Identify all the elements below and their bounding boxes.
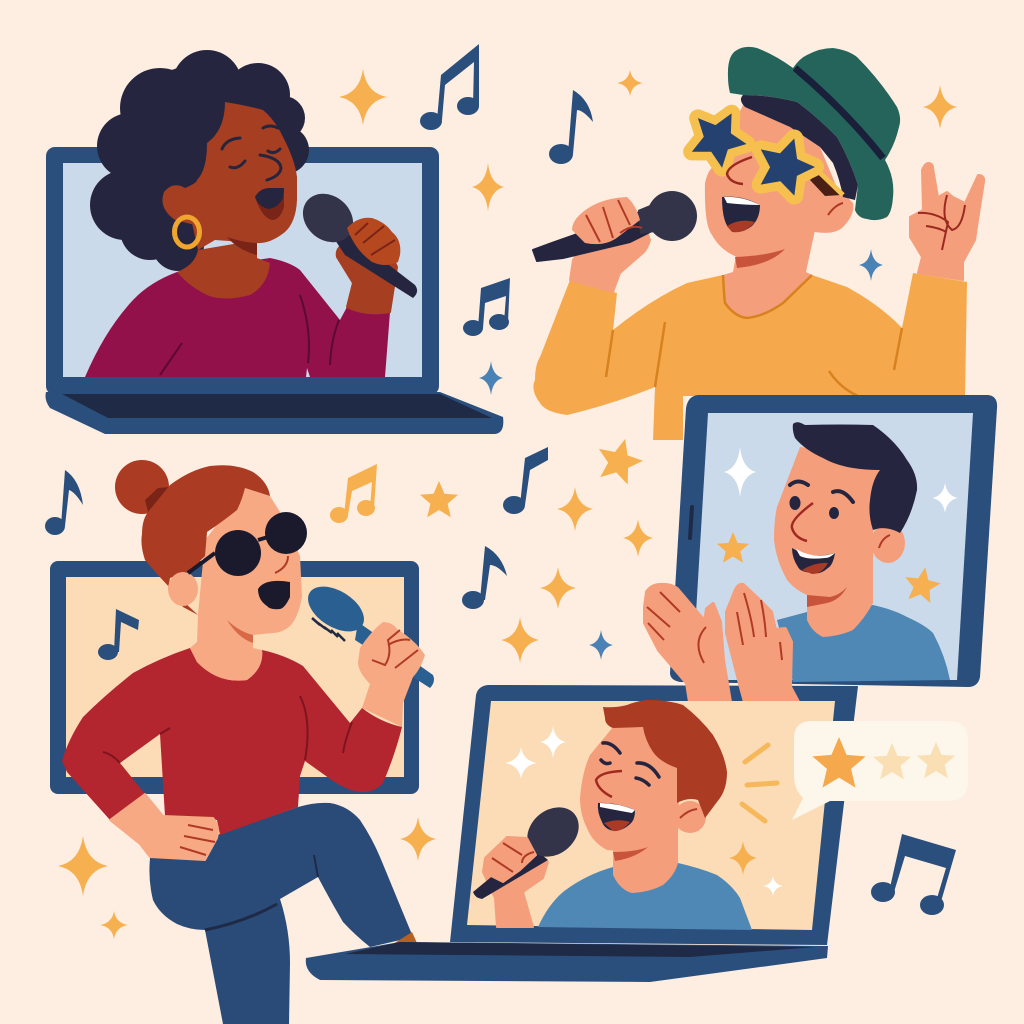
neck: [613, 825, 678, 893]
mouth: [598, 803, 635, 831]
sparkles and stars: [58, 69, 957, 939]
left hand: [645, 585, 730, 702]
single note lower: [462, 546, 507, 609]
laptop: top left: [46, 147, 503, 434]
orange music note: [330, 464, 377, 523]
palm: [570, 213, 650, 292]
shoe: [393, 932, 417, 944]
nose: [596, 771, 622, 797]
eyes and brows: [601, 743, 659, 785]
face: [705, 105, 840, 258]
eye: [727, 157, 752, 184]
sweater folds: [606, 322, 902, 396]
laptop: bottom right screen: [467, 701, 835, 930]
person: laughing singer with microphone: [473, 700, 777, 930]
fingers: [572, 197, 640, 244]
jeans: [149, 803, 413, 1024]
palm: [483, 850, 548, 927]
person: smiling viewer: [774, 422, 950, 682]
chin shadow: [227, 237, 257, 255]
hair: [90, 50, 309, 271]
ear: [162, 185, 195, 225]
fingers: [347, 218, 400, 265]
face: [185, 102, 297, 250]
microphone: [473, 845, 548, 899]
hair: [741, 95, 858, 200]
eyes brows nose: [222, 126, 281, 180]
small music note on screen: [98, 609, 139, 660]
hair: [141, 465, 270, 615]
shirt folds: [160, 295, 339, 375]
face: [580, 725, 680, 852]
single note top: [549, 90, 593, 164]
earring: [174, 217, 200, 247]
sweater: [533, 273, 967, 440]
neck: [177, 240, 270, 299]
person: singer with hat and star glasses: [533, 47, 984, 440]
single note centre: [503, 447, 548, 514]
ear: [815, 190, 853, 233]
sunglasses: [188, 512, 307, 576]
mouth: [722, 197, 760, 232]
blue sparkles: [479, 249, 883, 660]
hair: [793, 422, 917, 533]
mouth: [792, 548, 835, 573]
clapping hands: [645, 585, 798, 702]
music notes: [45, 44, 956, 915]
chin shadow: [613, 847, 648, 861]
microphone: [533, 212, 650, 261]
right hand: [727, 585, 798, 702]
double note top: [420, 44, 479, 130]
laptop: bottom left: [50, 561, 419, 794]
hairbrush: [300, 577, 434, 688]
white sparkles: [505, 447, 958, 896]
chin shadow: [807, 587, 847, 607]
ear: [871, 523, 905, 563]
hat band: [795, 68, 883, 158]
laptop: bottom right frame: [306, 685, 858, 982]
neck and face: [190, 488, 302, 681]
shirt: [777, 605, 950, 682]
shirt: [538, 863, 752, 930]
neck: [807, 555, 873, 637]
hand: [358, 622, 425, 727]
sweater: [62, 648, 402, 835]
speech bubble with star rating: [792, 721, 968, 820]
palm: [337, 240, 397, 313]
person: singer with sunglasses and hairbrush: [62, 460, 434, 1024]
excitement lines: [742, 745, 777, 821]
left hand on hip: [110, 794, 218, 860]
face: [774, 447, 880, 597]
neckline: [723, 275, 812, 318]
mouth: [255, 188, 284, 220]
sweater folds: [103, 696, 352, 763]
ear: [168, 572, 198, 606]
eyes: [790, 496, 800, 510]
hand rock sign: [910, 163, 984, 280]
chin shadow: [227, 620, 253, 643]
single note left: [45, 470, 83, 535]
sideburn: [810, 170, 842, 196]
mouth: [258, 581, 290, 609]
brows nose: [790, 482, 853, 502]
microphone: [335, 232, 417, 298]
finger lines: [647, 592, 782, 663]
fingers: [483, 837, 536, 882]
double note bottom right: [871, 834, 956, 915]
double note middle: [463, 278, 510, 336]
tablet: [670, 395, 997, 687]
hair: [603, 700, 727, 818]
hat: [728, 47, 900, 220]
chin shadow: [735, 249, 785, 268]
shirt: [85, 258, 390, 377]
person: singer with curly hair: [85, 50, 417, 377]
neck: [723, 230, 815, 318]
bun: [115, 460, 169, 514]
star glasses: [683, 100, 843, 199]
ear: [674, 801, 706, 833]
